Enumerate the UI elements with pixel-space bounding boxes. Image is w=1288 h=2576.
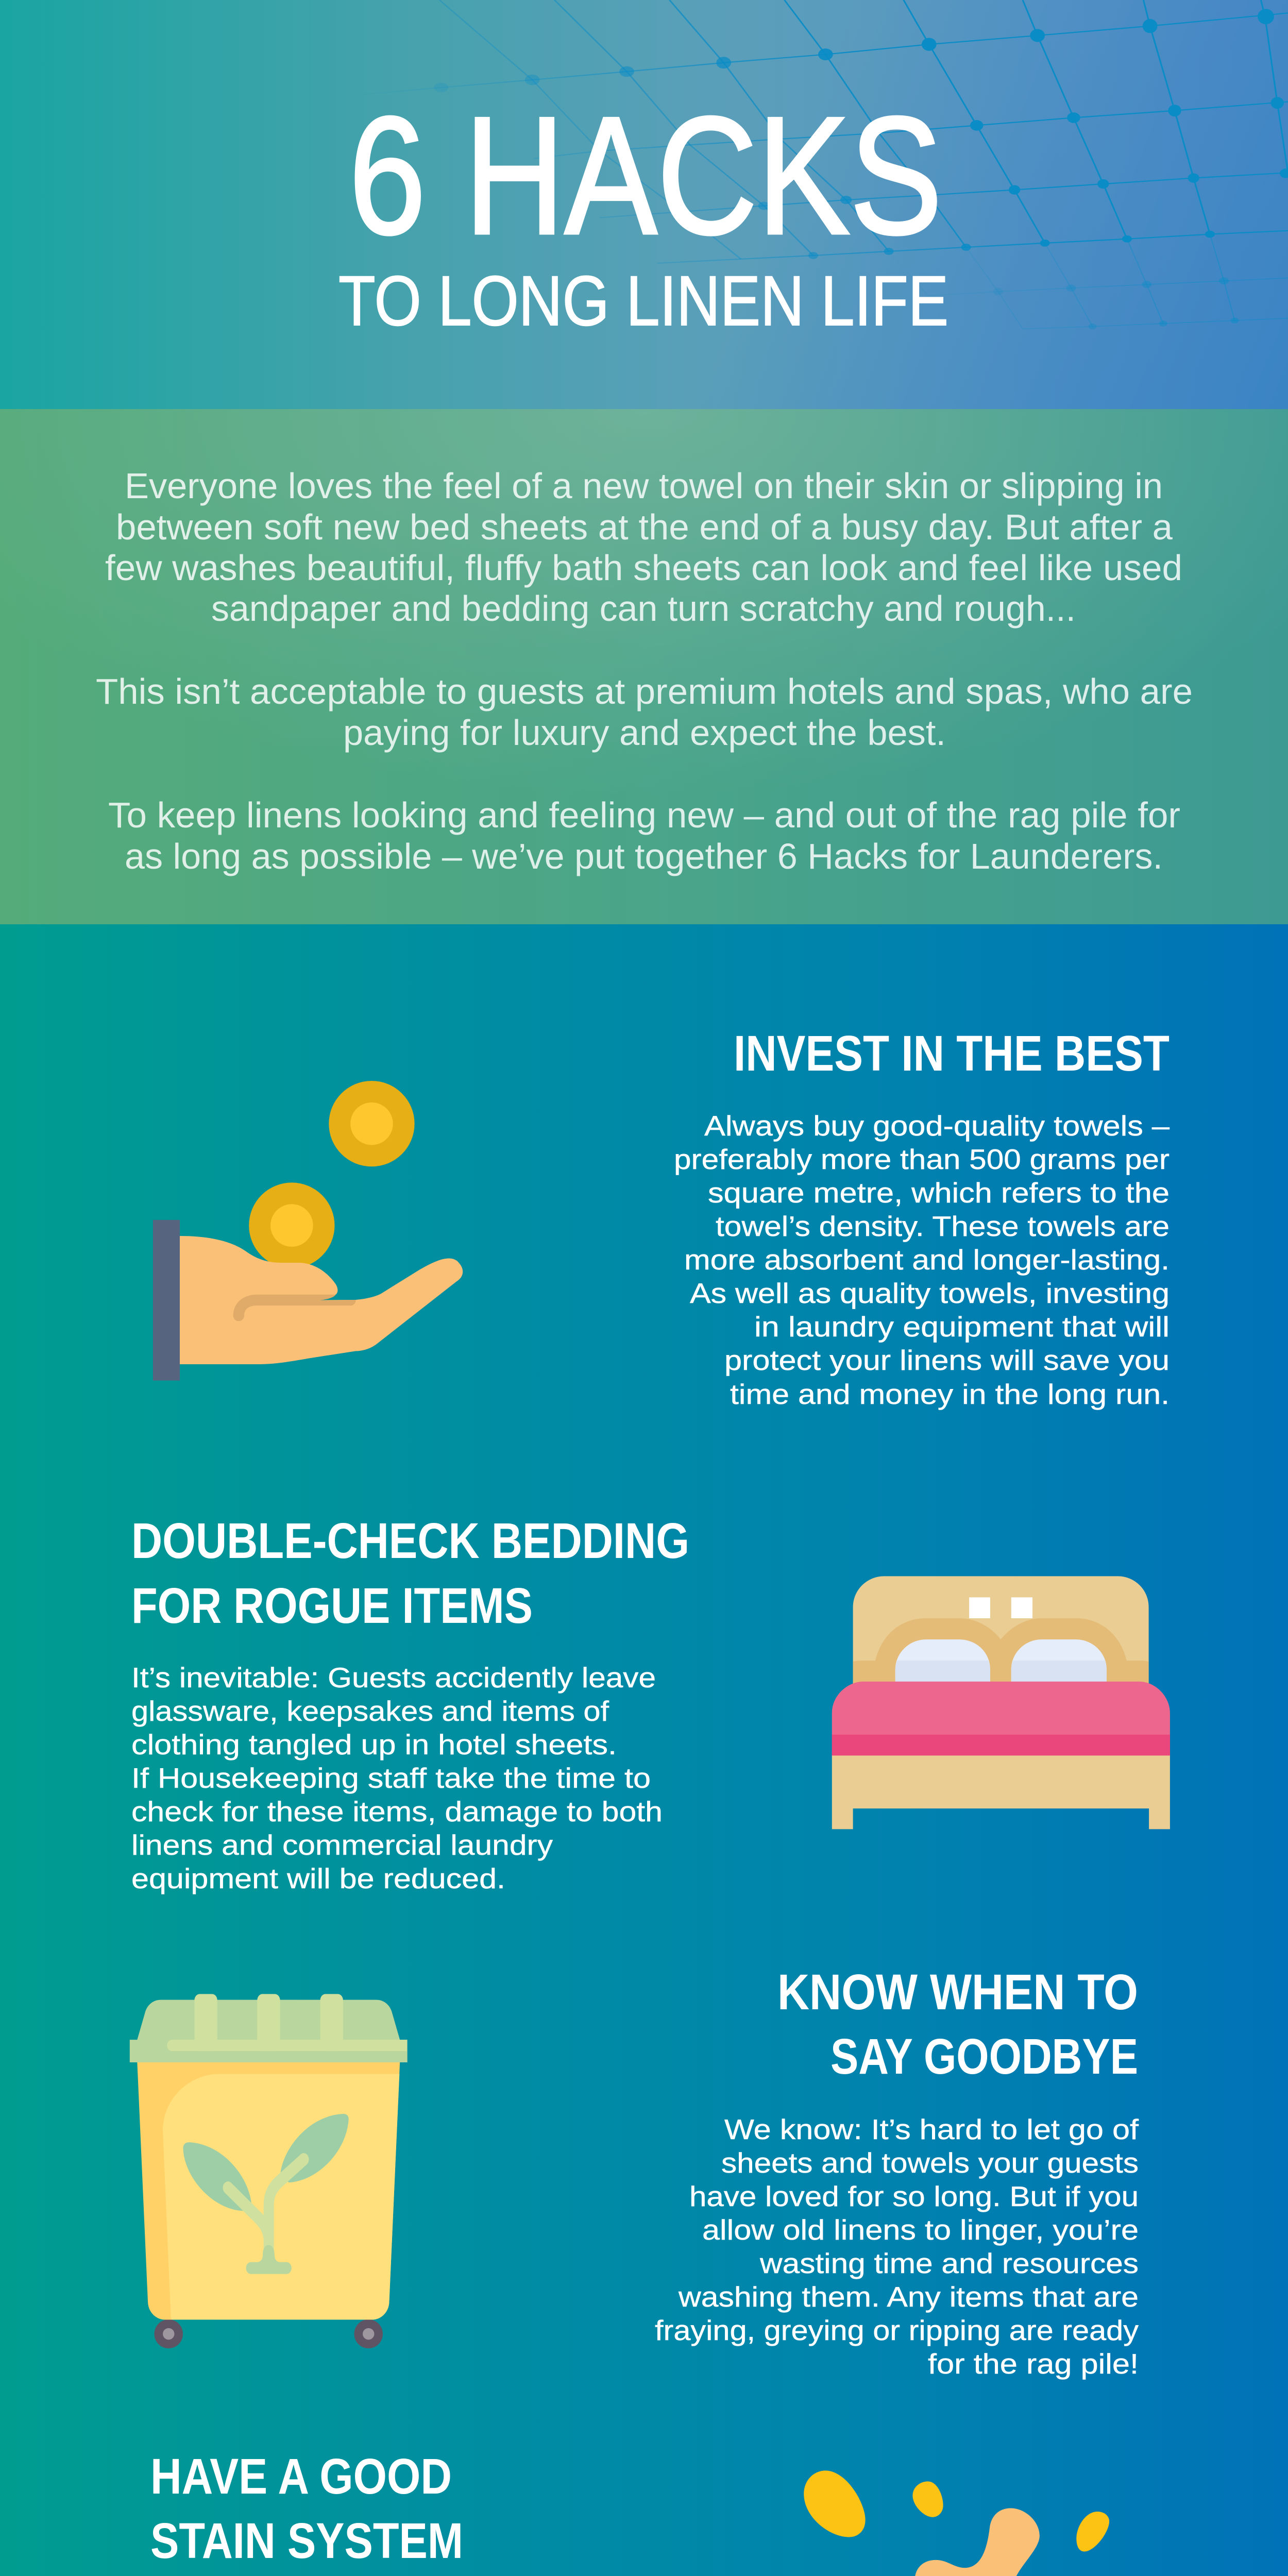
icon: recycling bin with plant: [130, 1994, 408, 2348]
body text: preferably more than 500 grams per: [674, 1143, 1170, 1175]
section 2: double-check bedding: [131, 1513, 1170, 1894]
intro text: [96, 466, 1193, 876]
body text: more absorbent and longer-lasting.: [684, 1244, 1170, 1276]
body text: We know: It’s hard to let go of: [724, 2113, 1139, 2145]
body text: fraying, greying or ripping are ready: [655, 2314, 1139, 2346]
body text: wasting time and resources: [759, 2247, 1139, 2279]
intro text: To keep linens looking and feeling new – and out of the rag pile for: [108, 795, 1180, 835]
body text: have loved for so long. But if you: [689, 2180, 1139, 2212]
heading: [131, 1513, 689, 1634]
panel: header: [0, 0, 1288, 409]
body text: check for these items, damage to both: [131, 1795, 663, 1827]
section 1: invest in the best: [153, 1025, 1170, 1410]
body text: allow old linens to linger, you’re: [702, 2214, 1139, 2246]
intro text: paying for luxury and expect the best.: [343, 713, 946, 753]
section 4: have a good stain system: [150, 2448, 1140, 2576]
body text: protect your linens will save you: [724, 1344, 1170, 1376]
body text: glassware, keepsakes and items of: [131, 1695, 609, 1727]
heading: DOUBLE-CHECK BEDDING: [131, 1513, 689, 1569]
body text: [131, 1662, 663, 1894]
body text: washing them. Any items that are: [678, 2281, 1139, 2313]
body text: sheets and towels your guests: [721, 2147, 1139, 2179]
heading: KNOW WHEN TO: [777, 1964, 1138, 2020]
intro text: Everyone loves the feel of a new towel on their skin or slipping in: [125, 466, 1163, 506]
body text: for the rag pile!: [928, 2348, 1139, 2380]
section 3: know when to say goodbye: [130, 1964, 1139, 2380]
title: 6 HACKS: [349, 82, 942, 269]
body text: Always buy good-quality towels –: [704, 1110, 1170, 1142]
body text: linens and commercial laundry: [131, 1829, 553, 1861]
intro text: few washes beautiful, fluffy bath sheets can look and feel like used: [105, 548, 1182, 588]
body text: clothing tangled up in hotel sheets.: [131, 1728, 617, 1760]
panel: introduction: [0, 409, 1288, 924]
icon: stain splash: [804, 2470, 1140, 2576]
heading: INVEST IN THE BEST: [734, 1025, 1170, 1081]
heading: STAIN SYSTEM: [150, 2513, 463, 2569]
icon: hand with coins: [153, 1081, 463, 1381]
intro text: as long as possible – we’ve put together 6 Hacks for Launderers.: [125, 836, 1163, 876]
heading: FOR ROGUE ITEMS: [131, 1578, 533, 1634]
intro text: between soft new bed sheets at the end of a busy day. But after a: [116, 507, 1173, 547]
body text: [674, 1110, 1170, 1410]
heading: [150, 2448, 463, 2569]
heading: HAVE A GOOD: [150, 2448, 452, 2504]
body text: As well as quality towels, investing: [690, 1277, 1170, 1309]
body text: in laundry equipment that will: [754, 1311, 1170, 1343]
heading: [777, 1964, 1138, 2084]
icon: bed: [832, 1576, 1170, 1829]
intro text: This isn’t acceptable to guests at premium hotels and spas, who are: [96, 671, 1193, 711]
body text: [655, 2113, 1139, 2380]
intro text: sandpaper and bedding can turn scratchy and rough...: [211, 588, 1076, 629]
body text: equipment will be reduced.: [131, 1862, 505, 1894]
heading: SAY GOODBYE: [831, 2028, 1138, 2084]
body text: towel’s density. These towels are: [716, 1210, 1170, 1242]
subtitle: TO LONG LINEN LIFE: [338, 262, 948, 341]
body text: It’s inevitable: Guests accidently leave: [131, 1662, 656, 1693]
body text: time and money in the long run.: [730, 1378, 1170, 1410]
body text: square metre, which refers to the: [708, 1177, 1170, 1209]
body text: If Housekeeping staff take the time to: [131, 1762, 651, 1794]
